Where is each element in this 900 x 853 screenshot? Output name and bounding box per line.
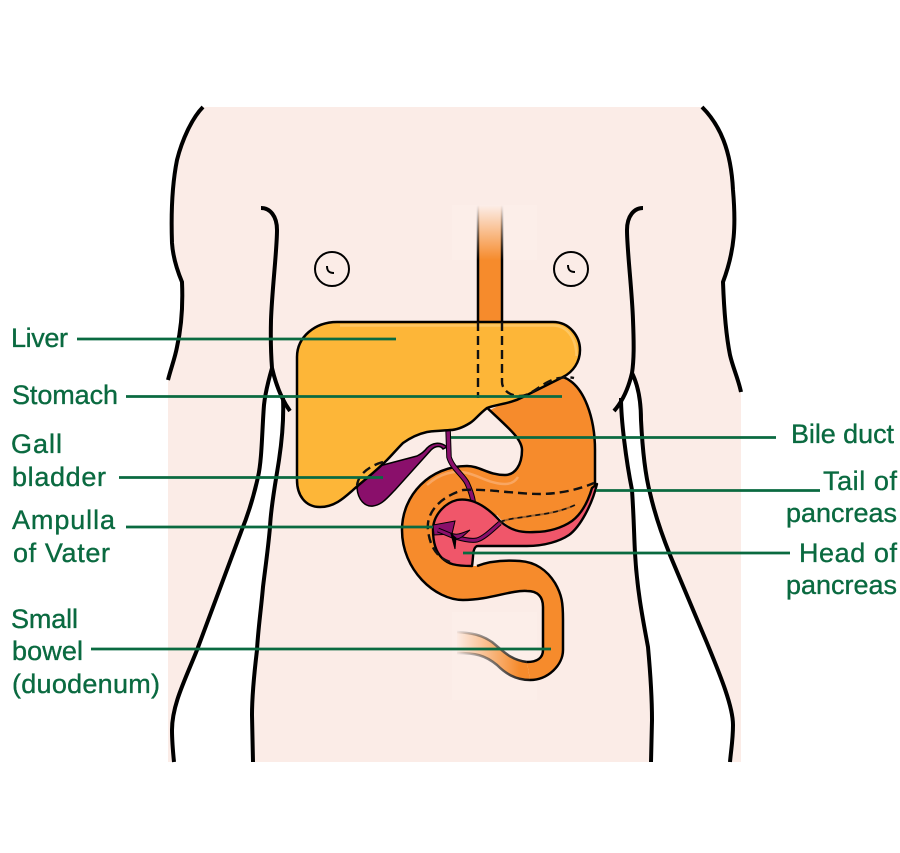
label: Head of pancreas: Head of [799,538,897,568]
pancreatic duct and ampulla of Vater [433,521,500,549]
leader line: gall bladder [119,476,383,479]
label: Liver: Liver [11,323,68,353]
label: Bile duct: Bile duct [791,419,894,449]
leader line: ampulla of Vater [126,526,433,528]
label: Small bowel (duodenum) [11,604,160,699]
label: Tail of pancreas: Tail of [823,466,897,496]
label: Ampulla of Vater [12,505,116,568]
stomach outline [402,377,595,680]
leader line: bile duct [451,436,776,439]
leader line: head of pancreas [463,552,790,554]
white area outside right shoulder [702,100,760,392]
liver [297,322,580,507]
label: Tail of pancreas: pancreas [786,498,897,528]
label: Ampulla of Vater: of Vater [13,538,110,568]
label: Small bowel (duodenum): Small [11,604,78,634]
white gap right arm [621,373,733,762]
label: Small bowel (duodenum): (duodenum) [12,669,160,699]
stomach and small bowel (duodenum) [402,377,595,680]
oesophagus [478,205,502,322]
dashed hidden outlines [357,322,594,562]
leader line: tail of pancreas [596,489,820,492]
hidden pancreas duct [500,505,575,522]
icon: left nipple [315,252,349,286]
liver highlight [340,326,576,356]
leader line: small bowel [91,648,551,650]
icon: right nipple [554,252,588,286]
label: Tail of pancreas [786,466,897,528]
label: Small bowel (duodenum): bowel [12,636,83,666]
body outline strokes [168,107,741,762]
bile duct [433,428,473,526]
label: Gall bladder: bladder [12,462,106,492]
label: Ampulla of Vater: Ampulla [12,505,116,535]
white gap left arm [172,372,283,762]
leader line: stomach [126,395,562,398]
duodenum highlight [427,472,518,485]
pancreas [433,484,597,566]
body outline and torso [150,100,760,762]
label: Stomach: Stomach [12,380,118,410]
duct branches [451,530,470,539]
label: Gall bladder [11,429,106,492]
faint fade panels [452,205,537,700]
small bowel fading end [457,632,530,680]
panel: body background [168,107,741,762]
leader line: liver [77,338,396,340]
label: Head of pancreas: pancreas [786,570,897,600]
label: Gall bladder: Gall [11,429,62,459]
label: Head of pancreas [786,538,897,600]
white area outside left shoulder [150,100,203,390]
gall bladder and cystic duct [357,443,447,506]
